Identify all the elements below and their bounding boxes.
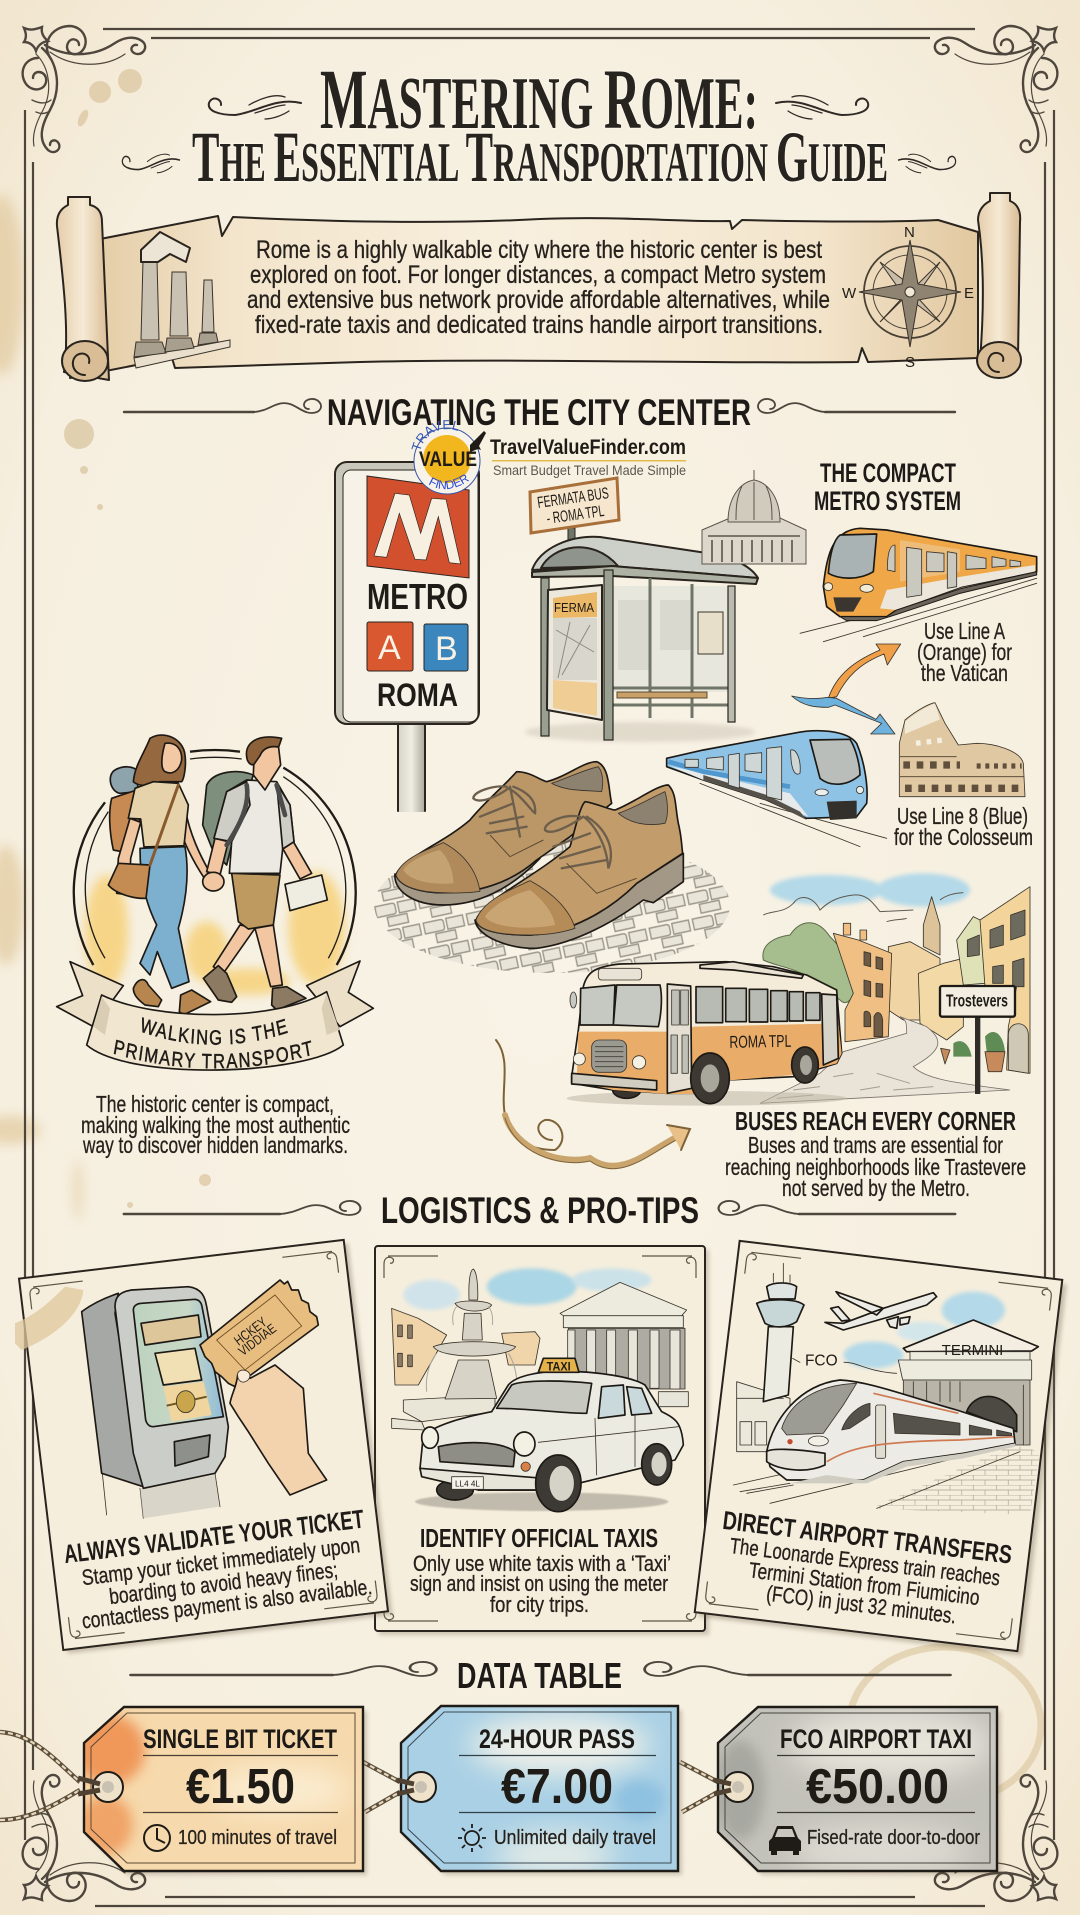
tag: 24-hour pass: 24-HOUR PASS <box>479 1724 635 1754</box>
label: line A: (Orange) for <box>917 639 1012 665</box>
ropes <box>0 1732 718 1820</box>
bus stop sign: - ROMA TPL <box>546 503 605 528</box>
icon: blue metro train <box>667 731 887 847</box>
panel: validate ticket card: ALWAYS VALIDATE YOUR TICKET <box>62 1504 366 1569</box>
scroll rolls <box>57 193 1021 381</box>
illustration: tower, plane, station, train: TERMINI <box>942 1343 1003 1359</box>
icon: orange bus <box>567 962 847 1106</box>
ribbon banner <box>56 960 374 1071</box>
illustration: fountain, temple and taxi <box>392 1268 688 1512</box>
illustration: fountain, temple and taxi: LL4 4L <box>455 1478 480 1488</box>
panel: intro scroll <box>57 193 1021 381</box>
text: buses reach every corner: not served by the Metro. <box>782 1175 970 1201</box>
label: the compact metro system <box>814 458 961 516</box>
panel: airport transfers card: Termini Station from Fiumicino <box>748 1557 981 1610</box>
sign: Trastevers <box>940 986 1015 1094</box>
label: line A: the Vatican <box>921 660 1008 686</box>
panel: validate ticket card: contactless payment is also available. <box>81 1574 373 1633</box>
panel: official taxis card: IDENTIFY OFFICIAL TAXIS <box>420 1523 658 1553</box>
icon: compass rose <box>842 224 974 371</box>
heading: logistics and pro-tips: LOGISTICS & PRO-TIPS <box>381 1190 699 1231</box>
icon: walking shoes <box>374 762 730 973</box>
icon: compass rose: N <box>904 224 915 241</box>
icon: orange bus: ROMA TPL <box>729 1031 792 1052</box>
back shoe <box>395 762 612 905</box>
text: walking description: making walking the most authentic <box>81 1112 350 1138</box>
logo: Travel Value Finder: FINDER <box>428 474 470 490</box>
icon: compass rose: E <box>964 285 974 302</box>
title: MASTERING ROME: <box>320 51 758 147</box>
tag: 24-hour pass: €7.00 <box>501 1760 613 1814</box>
panel: airport transfers card: The Loonarde Express train reaches <box>728 1533 1002 1590</box>
man <box>203 737 327 1010</box>
laces front <box>545 816 611 868</box>
ribbon banner: WALKING IS THE <box>142 1017 288 1046</box>
intro text: explored on foot. For longer distances, a compact Metro system <box>250 261 826 289</box>
intro text: and extensive bus network provide affordable alternatives, while <box>247 286 830 314</box>
icon: metro sign: B <box>435 630 458 668</box>
tag: airport taxi: €50.00 <box>806 1760 949 1814</box>
tag: airport taxi: FCO AIRPORT TAXI <box>780 1724 972 1754</box>
arrow: winding route <box>496 1040 690 1169</box>
label: the compact metro system: THE COMPACT <box>820 458 956 488</box>
tag: single ticket: 100 minutes of travel <box>178 1827 337 1849</box>
label: the compact metro system: METRO SYSTEM <box>814 486 961 516</box>
label: line B: for the Colosseum <box>894 824 1033 850</box>
panel: official taxis card <box>375 1246 709 1635</box>
icon: compass rose: W <box>842 285 857 302</box>
ribbon banner: PRIMARY TRANSPORT <box>114 1040 312 1069</box>
label: line B: Use Line 8 (Blue) <box>897 803 1028 829</box>
intro text: Rome is a highly walkable city where the historic center is best <box>256 236 822 264</box>
label: line B <box>894 803 1033 850</box>
intro text <box>247 236 830 339</box>
sign: Trastevers: Trostevers <box>946 991 1008 1011</box>
arrows: metro lines <box>792 644 901 734</box>
icon: St Peter's basilica <box>702 470 806 564</box>
bus stop sign <box>530 478 619 540</box>
title: THE ESSENTIAL TRANSPORTATION GUIDE <box>192 117 888 197</box>
panel: airport transfers card <box>695 1241 1067 1656</box>
tag: 24-hour pass <box>397 1706 682 1877</box>
icon: bus shelter: FERMA <box>554 600 594 615</box>
illustration: validator and ticket <box>15 1280 327 1518</box>
ring and wash <box>74 750 356 995</box>
illustration: validator and ticket: HCKEY <box>231 1313 270 1348</box>
logo: Travel Value Finder <box>411 420 686 494</box>
woman <box>108 735 211 1015</box>
text: walking description <box>81 1091 350 1158</box>
laces back <box>473 786 535 837</box>
icon: ruined columns <box>134 232 230 368</box>
panel: official taxis card: Only use white taxis with a ‘Taxi’ <box>413 1551 671 1576</box>
tag: 24-hour pass: Unlimited daily travel <box>494 1827 656 1849</box>
icon: metro sign: ROMA <box>377 677 458 713</box>
icon: orange metro train <box>800 528 1037 642</box>
illustration: fountain, temple and taxi: TAXI <box>547 1359 571 1373</box>
heading: data table: DATA TABLE <box>457 1655 622 1696</box>
icon: compass rose: S <box>905 354 915 371</box>
panel: validate ticket card: boarding to avoid heavy fines; <box>108 1557 339 1609</box>
front shoe <box>475 785 683 948</box>
icon: bus shelter <box>525 478 758 742</box>
text: walking description: The historic center is compact, <box>96 1091 334 1117</box>
bus stop sign: FERMATA BUS <box>536 485 610 512</box>
logo: Travel Value Finder: Smart Budget Travel Made Simple <box>493 462 686 478</box>
intro text: fixed-rate taxis and dedicated trains handle airport transitions. <box>255 311 823 339</box>
heading: navigating the city center: NAVIGATING THE CITY CENTER <box>327 392 751 433</box>
illustration: tower, plane, station, train: FCO <box>805 1353 838 1370</box>
icon: metro sign: A <box>378 629 401 667</box>
icon: metro sign: METRO <box>367 576 468 617</box>
panel: official taxis card: sign and insist on using the meter <box>410 1571 668 1596</box>
tag: airport taxi: Fised-rate door-to-door <box>807 1827 980 1849</box>
logo: Travel Value Finder: TravelValueFinder.com <box>490 436 686 459</box>
logo: Travel Value Finder: VALUE <box>419 448 477 471</box>
label: line A: Use Line A <box>924 618 1005 644</box>
label: line A <box>917 618 1012 686</box>
panel: validate ticket card <box>15 1240 392 1653</box>
icon: car <box>769 1826 801 1855</box>
tag: single ticket: SINGLE BIT TICKET <box>143 1724 337 1754</box>
heading: data table <box>131 1655 950 1696</box>
tag: single ticket: €1.50 <box>186 1760 295 1814</box>
icon: metro sign <box>335 462 479 812</box>
title <box>122 51 956 197</box>
panel: official taxis card: for city trips. <box>490 1592 589 1617</box>
heading: logistics and pro-tips <box>124 1190 955 1231</box>
illustration: trastevere street <box>760 873 1030 1103</box>
panel: airport transfers card: (FCO) in just 32 minutes. <box>765 1581 958 1628</box>
tag: single ticket <box>75 1707 367 1875</box>
logo: Travel Value Finder: TRAVEL <box>411 420 458 450</box>
text: buses reach every corner <box>725 1106 1026 1201</box>
icon: colosseum <box>899 703 1025 797</box>
tag: airport taxi <box>714 1707 1001 1875</box>
illustration: tower, plane, station, train <box>733 1263 1040 1515</box>
icon: clock <box>144 1825 170 1851</box>
icon: sun <box>458 1824 486 1852</box>
heading: navigating the city center <box>124 392 955 433</box>
illustration: couple walking <box>56 734 374 1071</box>
panel: validate ticket card: Stamp your ticket immediately upon <box>80 1532 361 1590</box>
text: walking description: way to discover hidden landmarks. <box>82 1132 348 1158</box>
illustration: validator and ticket: VIDDIAE <box>235 1321 279 1359</box>
